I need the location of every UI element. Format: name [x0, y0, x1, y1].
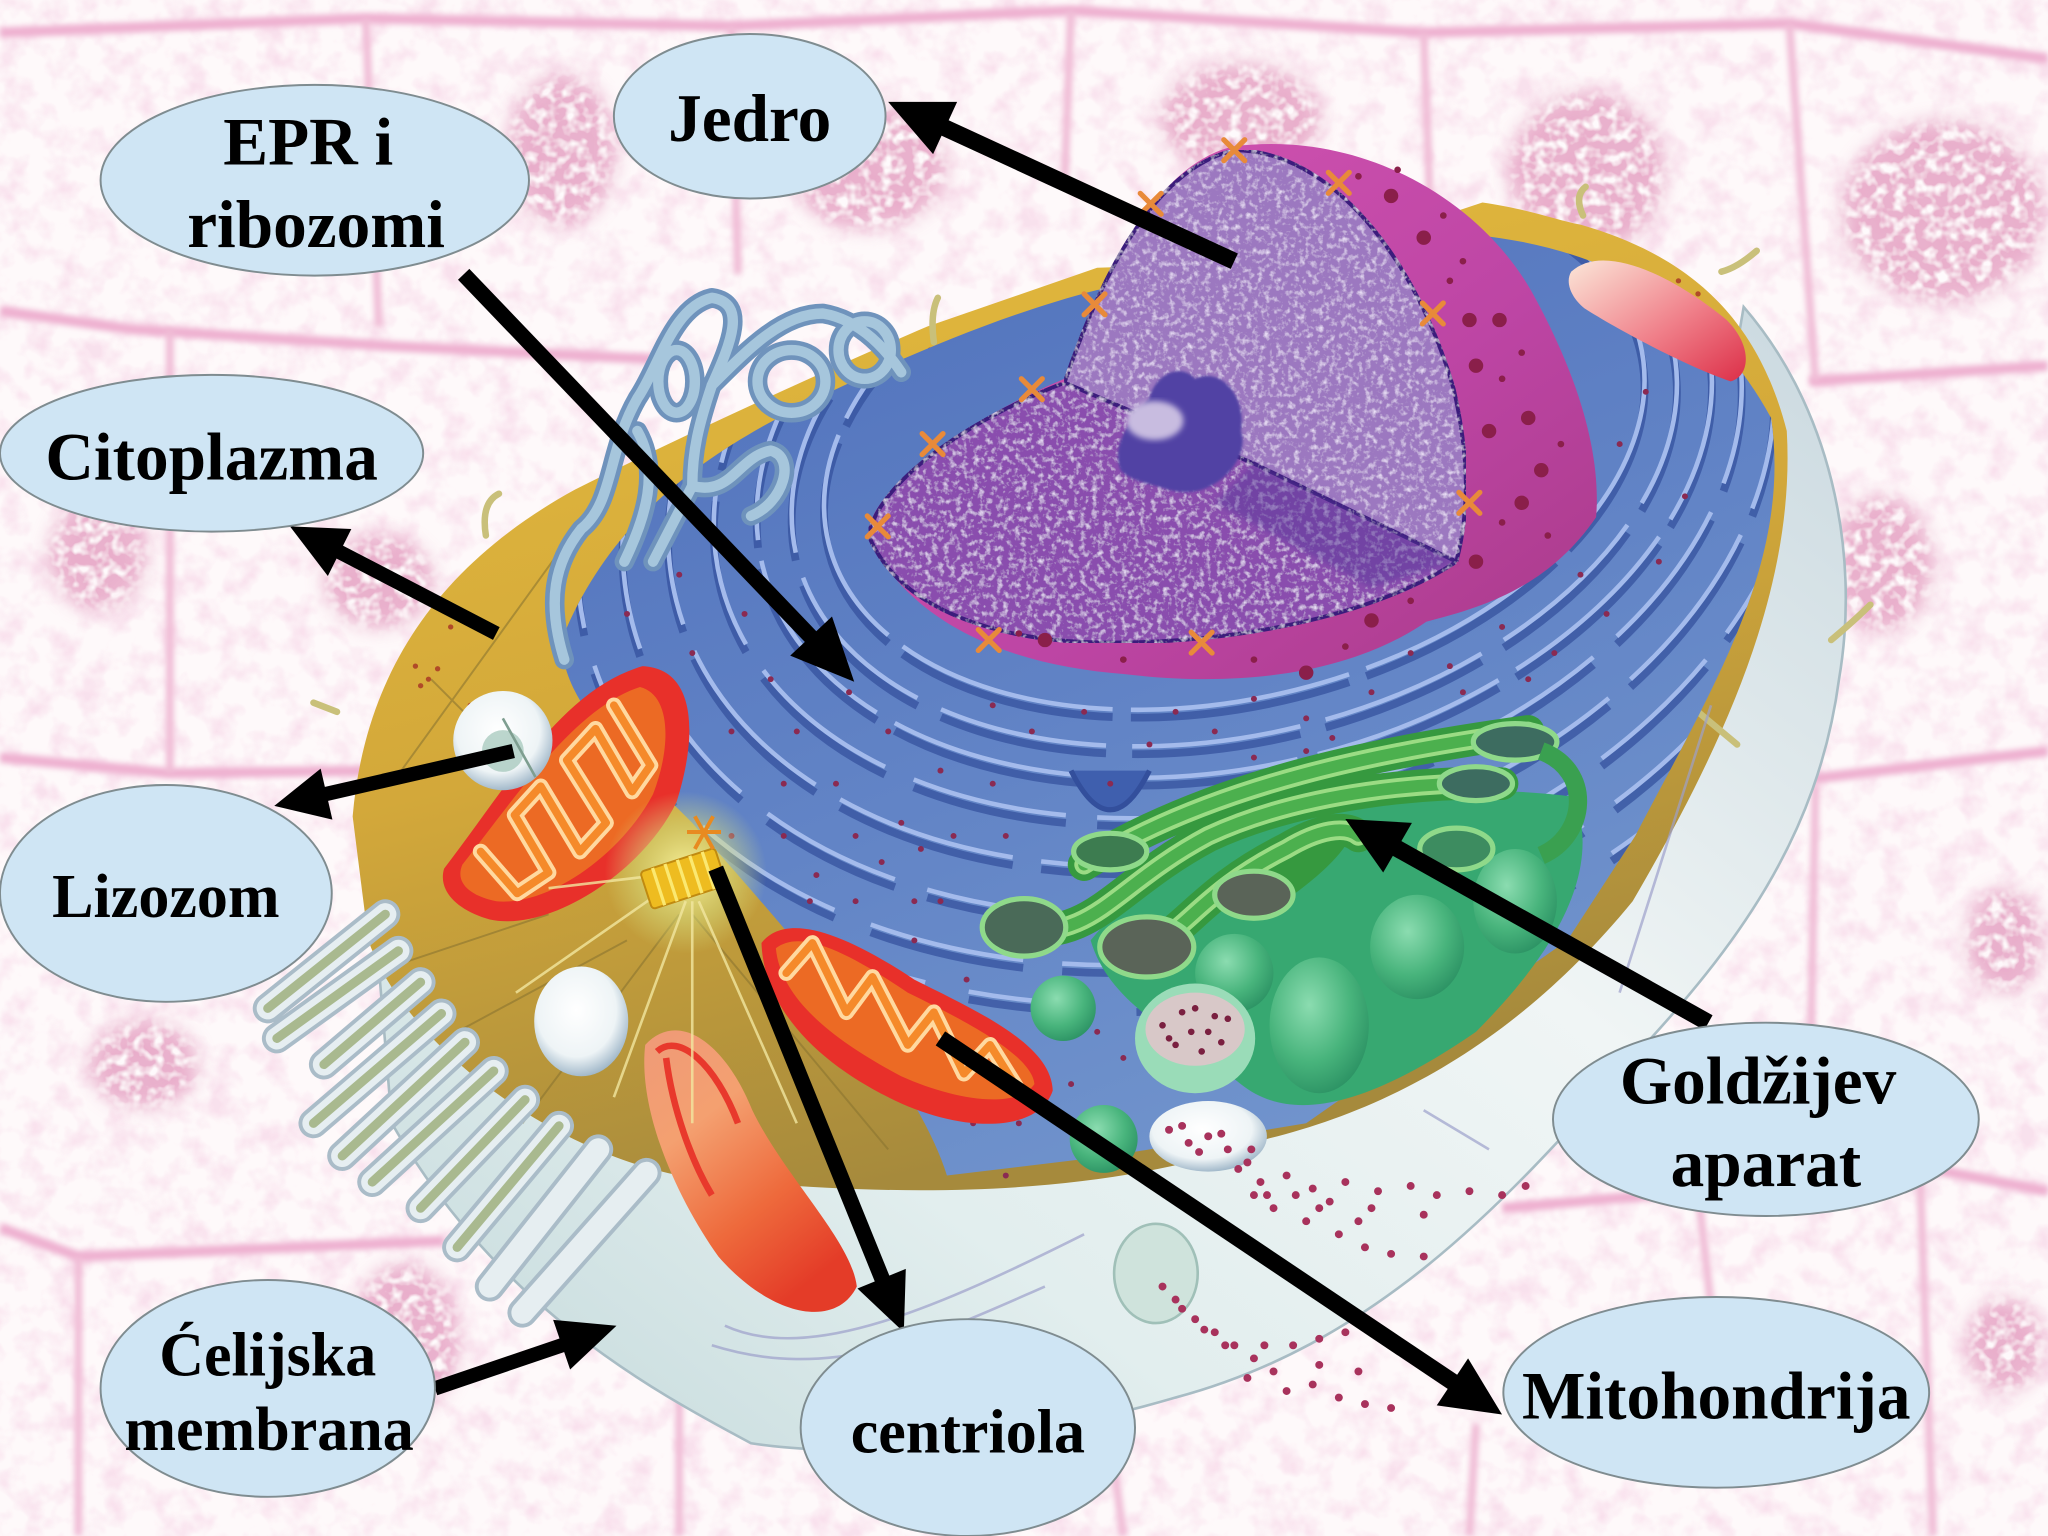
cytoplasm granules: [415, 281, 1698, 705]
label: Goldžijev aparat: [1553, 1023, 1979, 1216]
cell membrane outer shell: [379, 307, 1846, 1450]
arrow: Goldžijev aparat: [1345, 819, 1708, 1023]
cytoskeleton fibres: [392, 549, 888, 1149]
smooth endoplasmic reticulum: [555, 298, 901, 660]
golgi bulbs: [1091, 791, 1583, 1105]
mitochondrion cut bottom: [644, 1030, 857, 1312]
label: Ćelijska membrana: membrana: [124, 1396, 414, 1464]
arrow: Jedro: [888, 102, 1234, 261]
arrow: Lizozom: [274, 751, 513, 820]
label: Goldžijev aparat: Goldžijev: [1620, 1044, 1897, 1119]
mitochondrion upper left: [443, 666, 689, 921]
label: Citoplazma: [0, 375, 423, 532]
mitochondrion top right: [1569, 260, 1746, 381]
golgi apparatus: [982, 724, 1583, 1173]
arrow: Ćelijska membrana: [435, 1320, 616, 1388]
arrow: centriola: [716, 869, 906, 1332]
microvilli: [268, 914, 647, 1313]
dark spots on envelope: [1045, 196, 1541, 673]
membrane fibres: [712, 705, 1711, 1359]
label: Ćelijska membrana: Ćelijska: [159, 1321, 376, 1389]
nucleolus: [1118, 371, 1456, 588]
nucleus: [867, 140, 1597, 679]
cell illustration: [252, 137, 1874, 1450]
secreted particles: [1162, 1126, 1526, 1408]
golgi pouches: [982, 724, 1557, 977]
mitochondrion lower: [761, 928, 1053, 1124]
lysosome: [453, 691, 552, 790]
label: Jedro: Jedro: [668, 81, 831, 156]
centriole: [516, 792, 797, 1123]
label: Lizozom: [0, 785, 332, 1002]
golgi cisternae: [1012, 731, 1528, 951]
label: Jedro: [614, 34, 886, 199]
label: Lizozom: Lizozom: [52, 863, 280, 931]
nuclear envelope: [868, 144, 1597, 679]
nuclear pores: [867, 140, 1480, 653]
label: EPR i ribozomi: [101, 85, 529, 276]
ribosomes on reticulum: [627, 392, 1685, 1176]
label: EPR i ribozomi: ribozomi: [187, 187, 445, 262]
label: Citoplazma: Citoplazma: [45, 419, 378, 494]
arrow: Mitohondrija: [940, 1038, 1502, 1415]
arrow: EPR i ribozomi: [464, 274, 854, 682]
rough endoplasmic reticulum: [566, 236, 1774, 1178]
label: Goldžijev aparat: aparat: [1671, 1126, 1862, 1201]
golgi vesicles: [1031, 976, 1096, 1041]
nucleus interior floor: [869, 383, 1456, 643]
nucleus interior back wall: [1064, 150, 1466, 562]
cytoplasm: [353, 202, 1788, 1190]
arrow: Citoplazma: [290, 526, 496, 633]
label: EPR i ribozomi: EPR i: [223, 105, 393, 180]
label: Mitohondrija: Mitohondrija: [1522, 1358, 1911, 1433]
surface projections: [313, 187, 1870, 744]
label: Mitohondrija: [1503, 1297, 1929, 1488]
label: Ćelijska membrana: [101, 1280, 435, 1497]
label: centriola: centriola: [851, 1398, 1085, 1466]
label: centriola: [801, 1319, 1135, 1536]
exocytosis vesicles: [1114, 1101, 1267, 1323]
vacuole: [534, 967, 628, 1076]
